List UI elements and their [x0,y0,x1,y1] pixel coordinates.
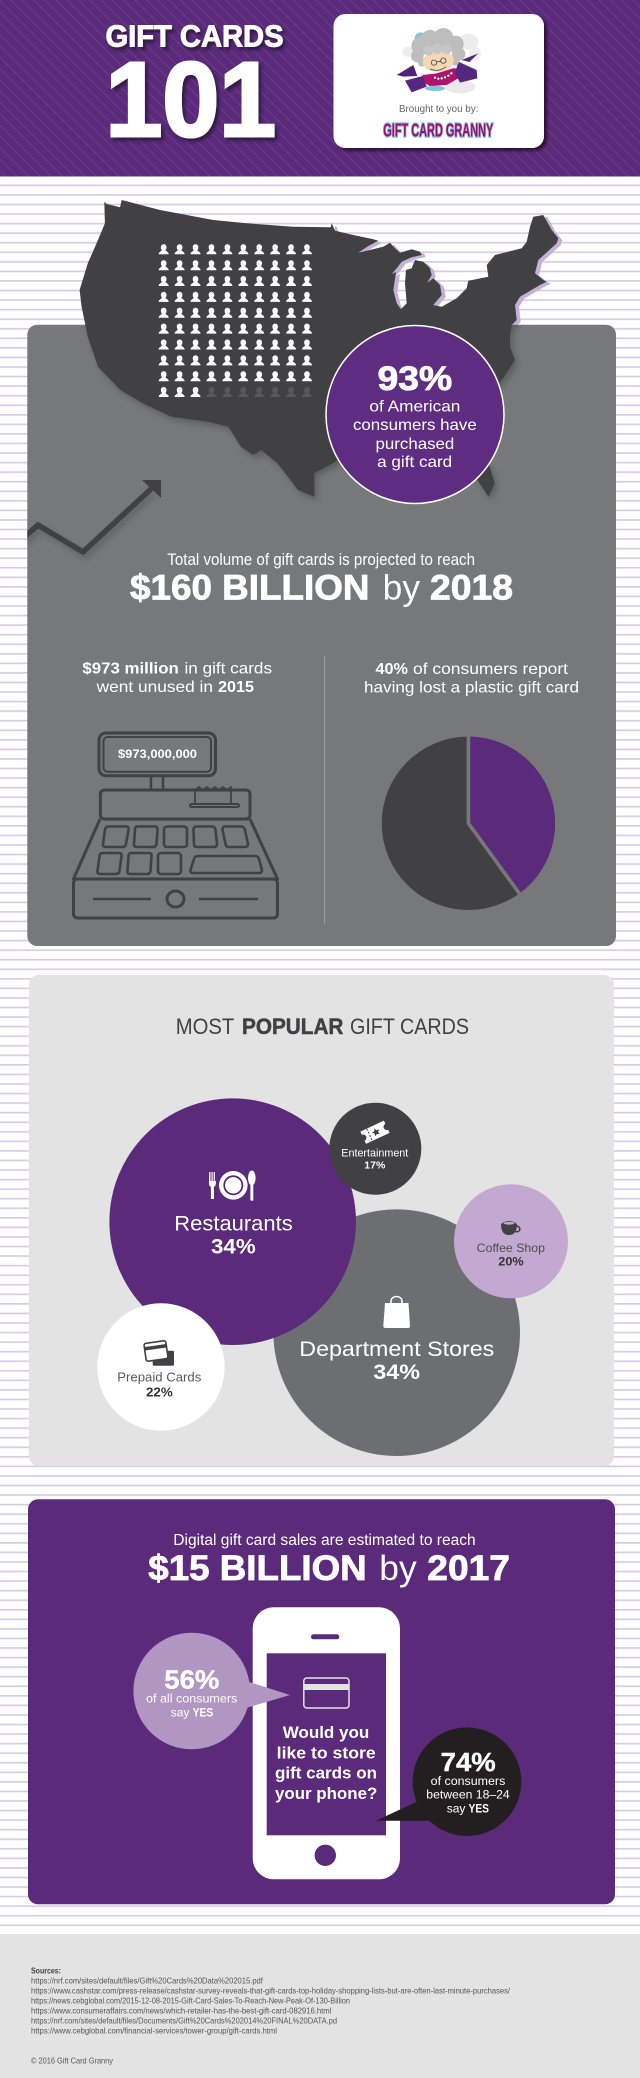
text: digital sales estimate: Digital gift card sales are estimated to reach [173,1532,476,1549]
bubble: coffee shop [454,1184,568,1298]
copyright: © 2016 Gift Card Granny [31,2056,114,2066]
source links [31,1975,511,2036]
map soft shadow [99,324,520,500]
callout: 93 percent: purchased [376,436,454,453]
text: 973 million unused: went unused in [96,679,213,696]
icon: granny mascot [397,28,481,93]
speech bubble: 74 percent [376,1727,521,1836]
panel: most popular gift cards [29,975,614,1466]
bubble: entertainment [329,1103,421,1195]
bubble: prepaid cards: 22% [146,1385,173,1400]
heading: POPULAR [242,1014,344,1039]
headline: 15 billion by 2017: 2017 [427,1549,510,1588]
callout: 93 percent [326,326,504,504]
map of the usa [80,200,558,497]
icon: shopping bag [383,1296,410,1328]
text: 40 percent lost: of consumers report [413,661,569,678]
map lilac shadow [84,202,562,499]
header banner [0,0,640,176]
source links: https://www.cebglobal.com/financial-services/tower-group/gift-cards.html [31,2026,277,2036]
callout: 93 percent: 93% [378,360,452,398]
heading: GIFT CARDS [350,1014,469,1039]
bubble: entertainment: Entertainment [341,1148,408,1160]
sources heading: Sources: [31,1966,61,1976]
speech bubble: 56 percent: YES [193,1706,213,1720]
speech bubble: 74 percent: say [447,1801,466,1815]
panel: grey statistics [15,200,616,946]
logo: gift card granny: GIFT CARD GRANNY [383,121,493,141]
headline: 15 billion by 2017: by [379,1549,417,1588]
callout: 93 percent: a gift card [377,454,452,471]
panel background [28,1499,615,1904]
bubble: prepaid cards: Prepaid Cards [117,1371,201,1385]
text: phone question: gift cards on [275,1764,377,1783]
icon: coffee cup [501,1221,520,1235]
text: phone question [275,1723,377,1803]
speech bubble: 56 percent: of all consumers [146,1692,237,1706]
speech bubble: 74 percent: of consumers [431,1774,505,1788]
register display amount: $973,000,000 [118,748,198,761]
text: total volume: Total volume of gift cards is projected to reach [167,551,475,569]
headline: 160 billion by 2018 [130,568,513,607]
icon: smartphone [253,1607,400,1879]
panel background [29,975,614,1466]
source links: https://news.cebglobal.com/2015-12-08-2015-Gift-Card-Sales-To-Reach-New-Peak-Of-130-Billion [31,1996,350,2006]
footer background [0,1934,640,2078]
heading [176,1014,469,1039]
headline: 160 billion by 2018: 2018 [430,568,513,607]
title: gift cards: GIFT CARDS [106,20,284,54]
brought to you by: Brought to you by: [399,103,478,115]
source links: https://nrf.com/sites/default/files/Gift%20Cards%20Data%202015.pdf [31,1975,263,1985]
callout: 93 percent: of American [369,399,460,416]
source links: https://nrf.com/sites/default/files/Documents/Gift%20Cards%202014%20FINAL%20DATA.pd [31,2016,337,2026]
footer: sources [0,1934,640,2078]
bubble: department stores [273,1209,520,1456]
header background [0,0,640,176]
icon: plate and cutlery [209,1170,256,1201]
headline: 160 billion by 2018: by [383,568,421,607]
source links: https://www.cashstar.com/press-release/cashstar-survey-reveals-that-gift-cards-top-holiday-shopping-lists-but-are-often-last-minute-purchases/ [31,1985,511,1995]
callout: 93 percent: consumers have [353,417,477,434]
panel background [27,325,616,946]
text: 40 percent lost [364,661,579,697]
bubble: entertainment: 17% [364,1161,385,1172]
text: 973 million unused: in gift cards [184,660,272,677]
text: 973 million unused: $973 million [82,660,179,677]
people grid: 93 of 100 [159,244,312,397]
bubble: restaurants [109,1098,356,1345]
bubble: restaurants: Restaurants [174,1213,293,1236]
speech bubble: 74 percent: YES [468,1801,489,1815]
bubble: prepaid cards [97,1303,225,1431]
heading: MOST [176,1014,234,1039]
bubble: department stores: 34% [373,1360,420,1384]
icon: cash register [74,733,278,918]
sponsor card [334,14,544,148]
speech bubble: 74 percent: between 18–24 [426,1788,510,1802]
speech bubble: 56 percent: 56% [164,1664,219,1694]
pie chart: 40 percent [382,735,555,910]
speech bubble: 56 percent: say [171,1706,190,1720]
headline: 15 billion by 2017: $15 BILLION [148,1549,367,1588]
text: phone question: like to store [277,1744,376,1763]
text: 973 million unused [82,660,272,696]
bubble: coffee shop: Coffee Shop [477,1241,545,1255]
title: 101: 101 [106,41,276,159]
text: 40 percent lost: having lost a plastic gift card [364,680,579,697]
text: phone question: Would you [283,1723,369,1742]
speech bubble: 74 percent: 74% [441,1747,496,1777]
arrow: rising trend [15,480,161,556]
source links: https://www.consumeraffairs.com/news/which-retailer-has-the-best-gift-card-082916.html [31,2006,332,2016]
speech bubble: 56 percent [133,1633,290,1749]
icon: cards [144,1341,174,1366]
headline: 160 billion by 2018: $160 BILLION [130,568,370,607]
text: phone question: your phone? [275,1784,377,1803]
bubble: department stores: Department Stores [299,1337,494,1361]
bubble: coffee shop: 20% [498,1254,524,1268]
icon: ticket [360,1121,390,1144]
icon: credit card [304,1678,349,1708]
text: 973 million unused: 2015 [218,679,254,696]
panel: digital gift cards [28,1499,615,1904]
headline: 15 billion by 2017 [148,1549,510,1588]
text: 40 percent lost: 40% [376,661,408,678]
bubble: restaurants: 34% [211,1235,256,1258]
card background [334,14,544,148]
